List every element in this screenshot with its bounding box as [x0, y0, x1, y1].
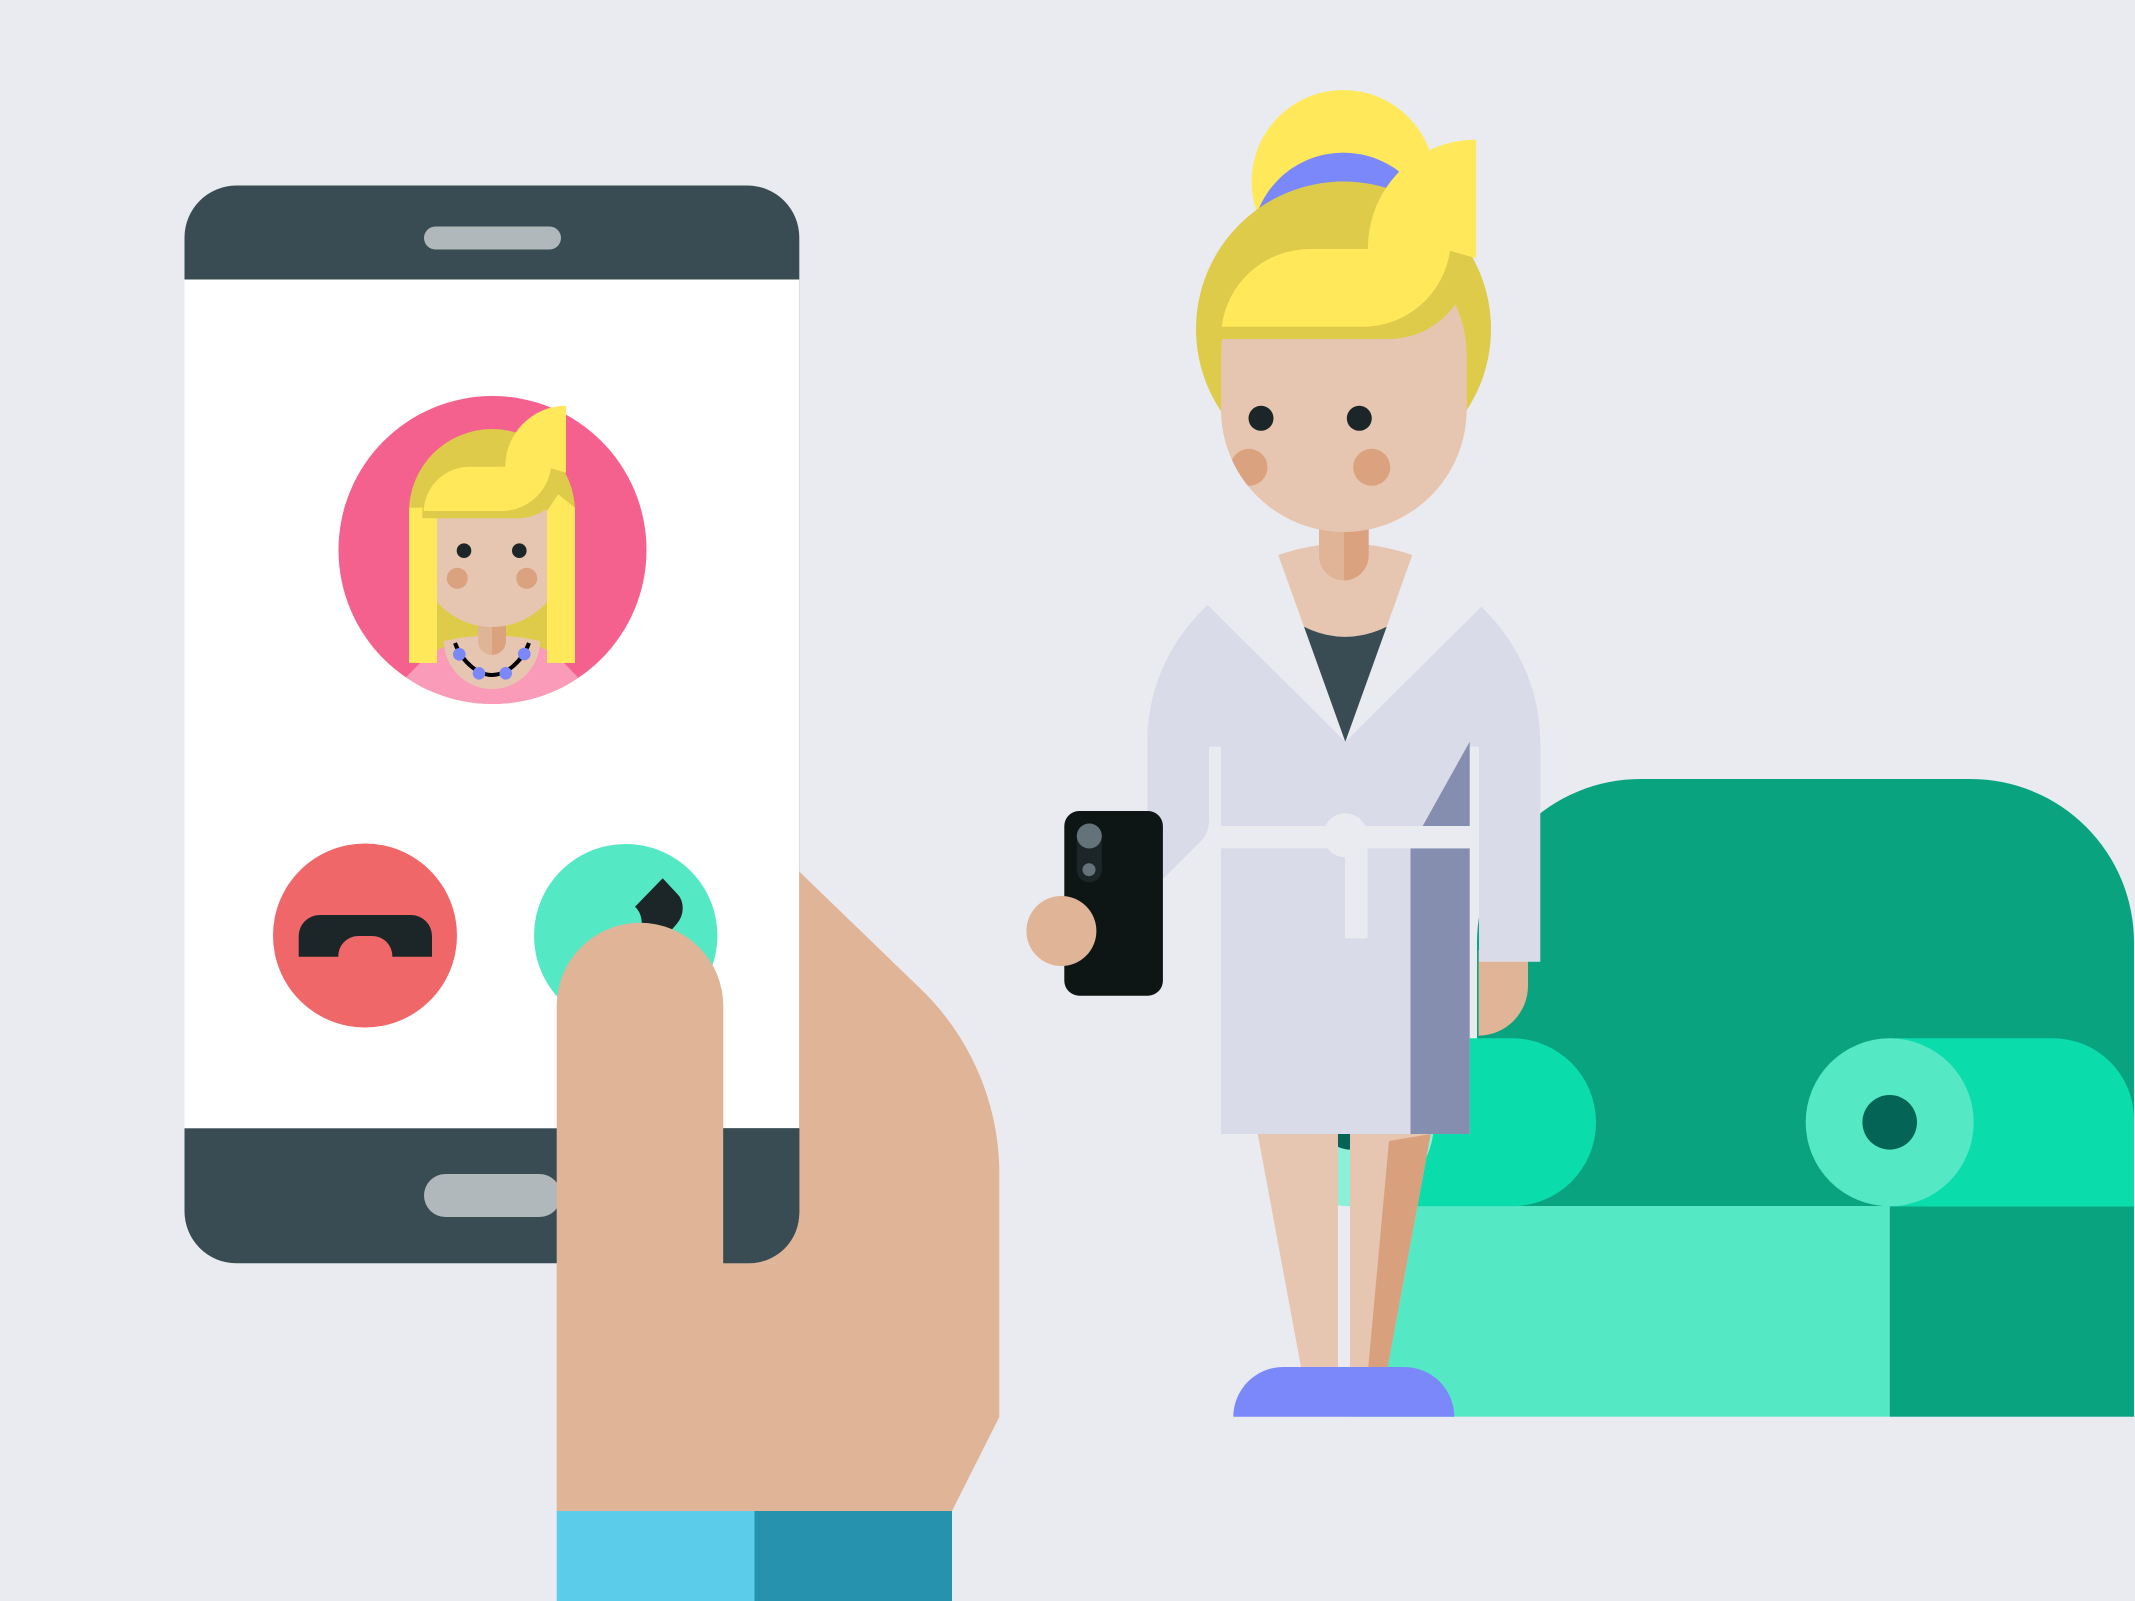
right cushion — [1890, 1038, 2134, 1206]
accept handset icon — [635, 878, 683, 934]
decline circle — [273, 844, 457, 1028]
thumb — [1026, 896, 1096, 966]
left armrest centre — [1323, 1095, 1377, 1150]
right hand — [1479, 950, 1528, 1036]
held phone body — [1064, 811, 1163, 996]
dress neckline — [1304, 627, 1387, 742]
neck dark side — [1344, 500, 1369, 580]
necklace beads — [453, 648, 531, 680]
sofa seat light — [1351, 1206, 1890, 1417]
left cushion — [1350, 1038, 1596, 1206]
hair tie — [1252, 153, 1435, 336]
decline handset icon — [299, 915, 432, 957]
avatar fringe — [424, 406, 566, 511]
cuff dark part — [754, 1511, 952, 1601]
belt — [1221, 813, 1470, 938]
avatar background circle — [338, 396, 646, 704]
belt strap — [1221, 826, 1470, 848]
left leg — [1257, 1130, 1338, 1367]
phone screen — [184, 280, 799, 1128]
sofa — [1266, 779, 2134, 1417]
bun — [1252, 90, 1435, 273]
held phone camera strip — [1077, 823, 1102, 882]
phone speaker — [424, 226, 561, 250]
avatar necklace — [453, 643, 531, 680]
avatar cheeks — [447, 568, 537, 589]
avatar eyes — [457, 543, 527, 558]
collar skin — [1278, 544, 1412, 637]
phone — [184, 185, 799, 1263]
phone body — [184, 185, 799, 1263]
avatar neck light side — [478, 615, 492, 655]
avatar collar skin — [444, 636, 540, 689]
fringe — [1222, 140, 1476, 327]
right armrest centre — [1862, 1095, 1917, 1150]
avatar left side hair — [409, 508, 437, 663]
coat shadow bottom — [1410, 848, 1470, 1134]
coat — [1147, 605, 1540, 1134]
avatar face — [437, 510, 547, 627]
hand behind phone corner — [749, 1213, 799, 1263]
camera lens — [1077, 824, 1102, 848]
avatar right side hair — [547, 494, 575, 663]
hair band shadow — [1221, 228, 1462, 339]
back hair — [1196, 182, 1491, 476]
hand finger and lower palm — [557, 923, 952, 1511]
right leg — [1350, 1130, 1432, 1367]
cuff — [557, 1511, 952, 1601]
cheeks — [1230, 449, 1390, 486]
face — [1221, 233, 1467, 532]
avatar sweater — [406, 646, 578, 704]
avatar — [338, 396, 646, 704]
camera flash — [1082, 863, 1096, 876]
neck light side — [1319, 500, 1344, 580]
avatar neck — [478, 615, 506, 655]
right armrest circle — [1806, 1038, 1974, 1206]
belt knot — [1323, 813, 1367, 857]
phone home button — [424, 1174, 561, 1217]
avatar neck dark side — [492, 615, 506, 655]
avatar hair band shadow — [422, 470, 560, 518]
eyes — [1248, 406, 1372, 431]
avatar back hair — [409, 429, 575, 655]
shoe — [1233, 1367, 1454, 1417]
necklace string — [455, 643, 529, 675]
neck — [1319, 500, 1369, 580]
decline button — [273, 844, 457, 1028]
cuff light part — [557, 1511, 754, 1601]
held phone — [1064, 811, 1163, 996]
phone bottom corner patch — [723, 1128, 799, 1263]
accept circle — [534, 844, 717, 1027]
hand palm behind phone — [780, 853, 999, 1511]
left armrest circle — [1266, 1038, 1434, 1206]
right leg shadow — [1368, 1134, 1431, 1367]
accept button — [534, 844, 717, 1027]
hand lower palm right — [723, 1263, 999, 1323]
sofa seat dark — [1890, 1206, 2134, 1417]
woman — [1026, 90, 1540, 1417]
sofa back — [1477, 779, 2134, 1206]
coat shadow top — [1423, 742, 1470, 826]
belt tail — [1345, 848, 1368, 938]
